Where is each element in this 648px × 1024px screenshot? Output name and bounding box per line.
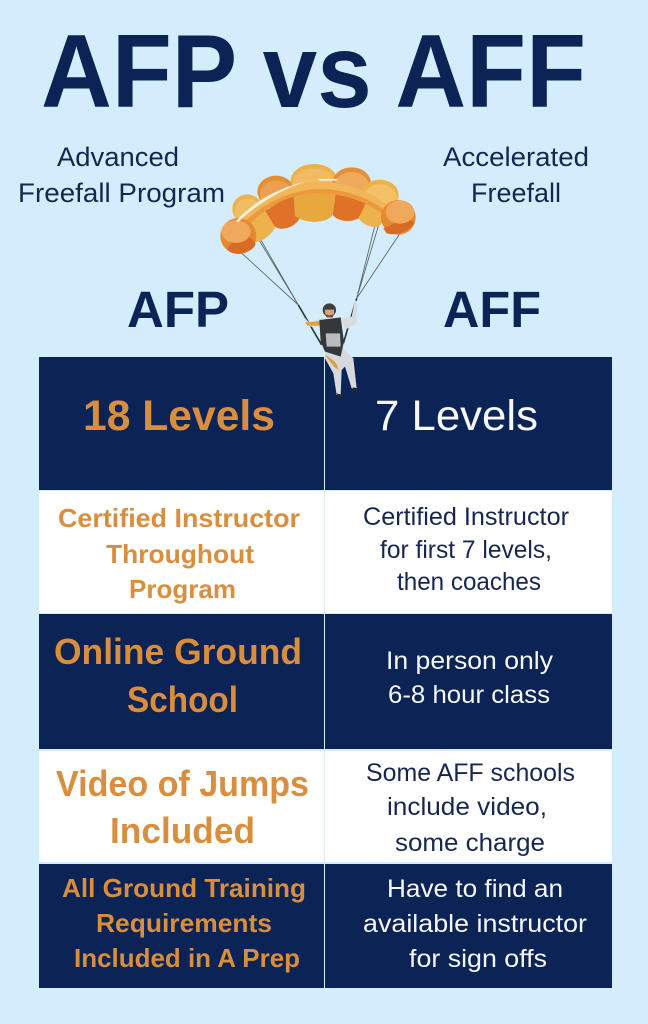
row 2: instructor: Program bbox=[129, 574, 236, 604]
row 5: ground training: Have to find an bbox=[387, 875, 563, 903]
arms bbox=[301, 313, 322, 327]
canopy highlights bbox=[236, 182, 305, 222]
row 5: ground training bbox=[62, 873, 587, 973]
head bbox=[323, 303, 336, 317]
row 5: ground training: All Ground Training bbox=[62, 873, 306, 903]
row 4: video bbox=[56, 759, 575, 857]
column heading: AFF: AFF bbox=[443, 281, 541, 338]
row 5: ground training: available instructor bbox=[363, 910, 587, 938]
canopy ends bbox=[220, 218, 256, 254]
canopy bbox=[220, 164, 416, 254]
subtitle: Accelerated Freefall: Freefall bbox=[471, 178, 561, 208]
subtitle: Advanced Freefall Program: Advanced bbox=[57, 142, 179, 172]
row 2: instructor: Certified Instructor bbox=[363, 503, 569, 531]
torso harness bbox=[319, 317, 344, 357]
row 4: video: include video, bbox=[387, 793, 547, 821]
upper lobes bbox=[232, 194, 262, 224]
row 5: ground training: for sign offs bbox=[409, 945, 547, 973]
subtitle: Accelerated Freefall: Accelerated bbox=[443, 142, 589, 172]
row 1: levels bbox=[83, 392, 538, 440]
canopy band bbox=[234, 182, 393, 230]
subtitle: Advanced Freefall Program: Freefall Program bbox=[18, 178, 225, 208]
icon: parachutist bbox=[220, 164, 416, 398]
legs bbox=[325, 347, 357, 395]
row 3: ground school: School bbox=[127, 679, 238, 720]
column heading: AFP: AFP bbox=[127, 281, 229, 338]
row 3: ground school: 6-8 hour class bbox=[388, 681, 550, 709]
row 4: video: Video of Jumps bbox=[56, 763, 309, 804]
title: AFP vs AFF bbox=[41, 14, 586, 130]
row 5: ground training: Requirements bbox=[96, 908, 272, 938]
row 3: ground school: Online Ground bbox=[54, 631, 302, 672]
row 3: ground school: In person only bbox=[386, 647, 554, 675]
parachute lines bbox=[232, 209, 407, 305]
row 4: video: Some AFF schools bbox=[366, 759, 575, 787]
row 5: ground training: Included in A Prep bbox=[74, 943, 300, 973]
row 4: video: some charge bbox=[395, 829, 545, 857]
risers bbox=[298, 298, 357, 345]
subtitle: Accelerated Freefall bbox=[443, 142, 589, 208]
row 2: instructor: Throughout bbox=[106, 539, 254, 569]
row 3: ground school bbox=[54, 631, 554, 720]
row 2: instructor: for first 7 levels, bbox=[380, 536, 552, 564]
skydiver bbox=[301, 300, 358, 398]
row 2: instructor: then coaches bbox=[397, 568, 541, 596]
subtitle: Advanced Freefall Program bbox=[18, 142, 225, 208]
row 2: instructor: Certified Instructor bbox=[58, 503, 300, 533]
row 2: instructor bbox=[58, 503, 569, 604]
row 4: video: Included bbox=[110, 810, 255, 851]
comparison table bbox=[39, 357, 612, 988]
row 1: levels: 18 Levels bbox=[83, 392, 275, 440]
canopy lower cells bbox=[242, 208, 277, 242]
row 1: levels: 7 Levels bbox=[375, 392, 538, 440]
